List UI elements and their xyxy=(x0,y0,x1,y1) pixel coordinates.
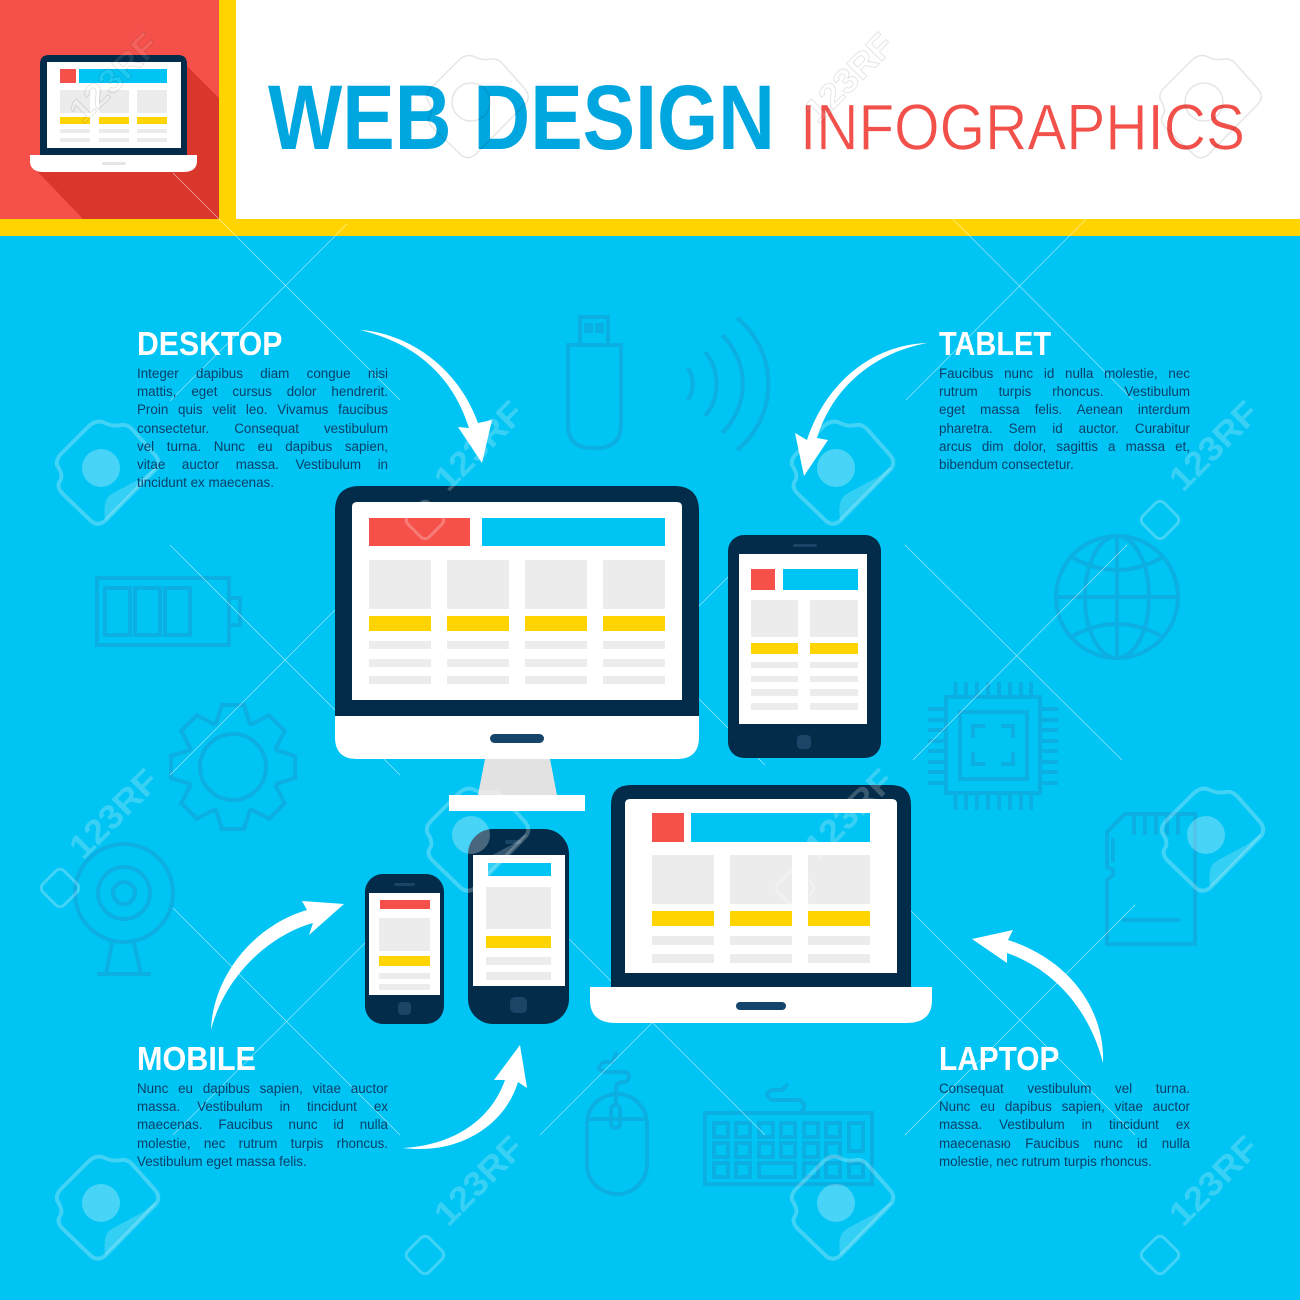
icon: webcam xyxy=(75,844,173,974)
arrow: laptop xyxy=(972,930,1103,1063)
stock watermark overlay: 123RF xyxy=(797,26,902,131)
stock watermark overlay: 123RF xyxy=(797,762,902,867)
stock watermark overlay: 123RF xyxy=(62,762,167,867)
device: laptop xyxy=(590,785,932,1023)
device: tablet xyxy=(728,535,881,758)
background line icons xyxy=(75,317,1195,1194)
panel: tablet xyxy=(939,325,1190,472)
icon: wireless signal xyxy=(688,318,768,450)
text block: desktop: vel turna. Nunc eu dapibus sapien, xyxy=(137,439,388,454)
stock watermark overlay: 123RF xyxy=(1162,1129,1267,1234)
arrow: tablet xyxy=(795,343,927,476)
heading: mobile: MOBILE xyxy=(137,1040,256,1077)
device: large phone xyxy=(468,829,569,1024)
panel: laptop xyxy=(939,1040,1190,1169)
text block: tablet: Faucibus nunc id nulla molestie, nec xyxy=(939,366,1190,381)
icon: mouse xyxy=(587,1052,647,1194)
icon: gear xyxy=(171,705,295,829)
text block: laptop: Consequat vestibulum vel turna. xyxy=(939,1081,1190,1096)
device: desktop monitor xyxy=(335,486,699,811)
arrow: mobile upper xyxy=(211,901,344,1030)
text block: laptop: molestie, nec rutrum turpis rhoncus. xyxy=(939,1154,1152,1169)
text block: mobile: Nunc eu dapibus sapien, vitae auctor xyxy=(137,1081,388,1096)
text block: desktop: mattis, eget cursus dolor hendrerit. xyxy=(137,384,388,399)
icon: cpu chip xyxy=(928,682,1058,810)
arrow: desktop xyxy=(360,330,492,463)
title: infographics: INFOGRAPHICS xyxy=(800,90,1245,164)
device: small phone xyxy=(365,874,444,1024)
text block: mobile: Vestibulum eget massa felis. xyxy=(137,1154,307,1169)
text block: mobile xyxy=(137,1081,388,1169)
icon: memory card xyxy=(1107,814,1195,944)
text block: tablet xyxy=(939,366,1190,472)
text block: tablet: bibendum consectetur. xyxy=(939,457,1074,472)
text block: desktop: Integer dapibus diam congue nisi xyxy=(137,366,388,381)
text block: laptop xyxy=(939,1081,1190,1169)
stock watermark overlay: 123RF xyxy=(427,394,532,499)
text block: tablet: eget massa felis. Aenean interdum xyxy=(939,402,1190,417)
heading: tablet: TABLET xyxy=(939,325,1051,362)
stock watermark overlay: 123RF xyxy=(427,1129,532,1234)
text block: desktop: consectetur. Consequat vestibulum xyxy=(137,421,388,436)
text block: desktop xyxy=(137,366,388,490)
heading: laptop: LAPTOP xyxy=(939,1040,1059,1077)
text block: desktop: vitae auctor massa. Vestibulum in xyxy=(137,457,388,472)
stock watermark hairlines xyxy=(170,172,1135,1135)
heading: desktop: DESKTOP xyxy=(137,325,282,362)
text block: desktop: tincidunt ex maecenas. xyxy=(137,475,274,490)
icon: keyboard xyxy=(705,1084,872,1184)
title: web design: WEB DESIGN xyxy=(268,67,775,169)
text block: laptop: maecenasю Faucibus nunc id nulla xyxy=(939,1136,1190,1151)
icon: usb stick xyxy=(568,317,621,448)
text block: laptop: Nunc eu dapibus sapien, vitae auctor xyxy=(939,1099,1190,1114)
panel: desktop xyxy=(137,325,388,490)
text block: mobile: molestie, nec rutrum turpis rhoncus. xyxy=(137,1136,388,1151)
icon: laptop badge xyxy=(0,0,219,219)
text block: tablet: arcus dim dolor, sagittis a massa et, xyxy=(939,439,1190,454)
text block: mobile: massa. Vestibulum in tincidunt ex xyxy=(137,1099,388,1114)
stock watermark overlay: 123RF xyxy=(1162,394,1267,499)
text block: laptop: massa. Vestibulum in tincidunt ex xyxy=(939,1117,1190,1132)
icon: battery xyxy=(97,578,240,645)
arrow: mobile lower xyxy=(403,1045,527,1149)
text block: desktop: Proin quis velit leo. Vivamus faucibus xyxy=(137,402,388,417)
stock watermark overlay: 123RF xyxy=(62,26,167,131)
text block: tablet: rutrum turpis rhoncus. Vestibulum xyxy=(939,384,1190,399)
panel: mobile xyxy=(137,1040,388,1169)
header band xyxy=(0,0,1300,236)
text block: tablet: pharetra. Sem id auctor. Curabitur xyxy=(939,421,1190,436)
icon: globe xyxy=(1056,536,1178,658)
text block: mobile: maecenas. Faucibus nunc id nulla xyxy=(137,1117,388,1132)
